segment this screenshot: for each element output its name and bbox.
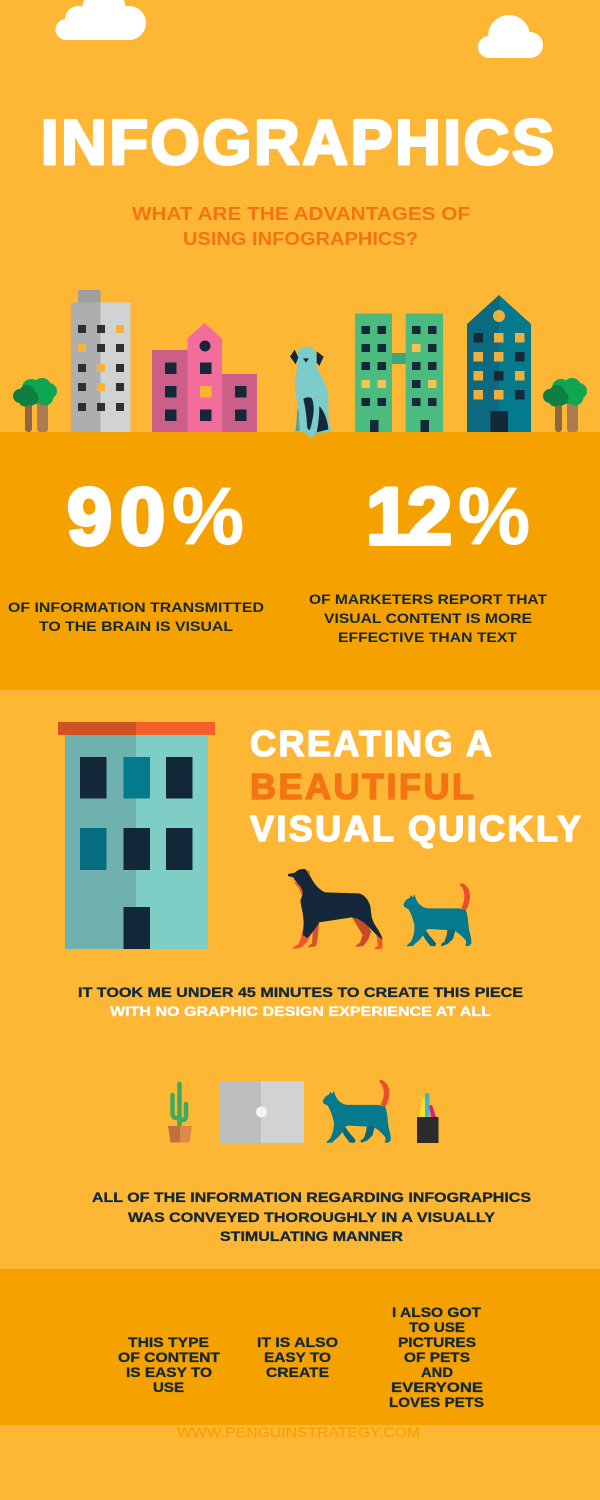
text: 90 percent caption: TO THE BRAIN IS VISUAL [39,618,233,634]
heading: creating a beautiful visual quickly: CREATING A [250,723,492,764]
text: information summary: ALL OF THE INFORMATION REGARDING INFOGRAPHICS [92,1190,531,1205]
icon: green twin tower [355,314,443,432]
icon: pencil cup [417,1093,438,1143]
text: easy to create [257,1335,338,1380]
text: pictures of pets: I ALSO GOT [392,1305,482,1320]
icon: pink building [152,323,257,432]
text: creation time note [78,985,523,1019]
icon: cat [403,883,471,946]
text: pictures of pets: EVERYONE [391,1380,483,1395]
icon: left cloud [56,0,146,40]
text: easy to create: EASY TO [264,1350,331,1365]
text: pictures of pets: TO USE [409,1320,465,1335]
subtitle: WHAT ARE THE ADVANTAGES OF [132,203,470,224]
text: pictures of pets: OF PETS [404,1350,470,1365]
icon: right cloud [478,15,543,58]
text: 90 percent caption: OF INFORMATION TRANSMITTED [8,599,264,615]
text: 12 percent caption: OF MARKETERS REPORT THAT [309,591,547,607]
footer: website: WWW.PENGUINSTRATEGY.COM [177,1425,420,1440]
title: INFOGRAPHICS [41,108,554,178]
text: pictures of pets: LOVES PETS [389,1395,484,1410]
band: statistics background [0,432,600,690]
text: easy to use: USE [153,1380,184,1395]
subtitle: USING INFOGRAPHICS? [183,228,418,249]
icon: large teal building [58,722,215,949]
heading: creating a beautiful visual quickly: VISUAL QUICKLY [250,808,581,849]
text: pictures of pets: AND [421,1365,453,1380]
icon: rottweiler dog [288,869,382,949]
text: creation time note: WITH NO GRAPHIC DESIGN EXPERIENCE AT ALL [110,1004,491,1019]
icon: cactus [168,1084,192,1142]
text: pictures of pets: PICTURES [398,1335,476,1350]
icon: left trees [13,378,57,432]
icon: cat second [323,1080,391,1143]
heading: creating a beautiful visual quickly: BEAUTIFUL [250,766,474,807]
text: easy to use [118,1335,221,1395]
text: 12 percent caption [309,591,547,645]
text: 12 percent caption: VISUAL CONTENT IS MORE [324,610,532,626]
icon: right trees [543,378,587,432]
text: easy to create: CREATE [266,1365,329,1380]
heading: creating a beautiful visual quickly [250,723,581,849]
text: information summary [92,1190,531,1244]
icon: sitting dog [290,347,332,439]
icon: tablet [219,1081,304,1143]
band: bottom three points background [0,1269,600,1425]
text: easy to use: THIS TYPE [128,1335,209,1350]
text: 12 percent caption: EFFECTIVE THAN TEXT [338,629,517,645]
text: easy to use: IS EASY TO [126,1365,212,1380]
text: information summary: STIMULATING MANNER [220,1229,403,1244]
text: information summary: WAS CONVEYED THOROUGHLY IN A VISUALLY [128,1210,495,1225]
subtitle [132,203,470,249]
icon: grey tower [71,290,130,432]
text: easy to use: OF CONTENT [118,1350,221,1365]
text: 90 percent caption [8,599,264,634]
stat: 90 percent: 90% [67,472,244,562]
icon: blue townhouse [467,295,531,432]
text: easy to create: IT IS ALSO [257,1335,338,1350]
text: creation time note: IT TOOK ME UNDER 45 MINUTES TO CREATE THIS PIECE [78,985,523,1000]
text: pictures of pets [389,1305,484,1410]
stat: 12 percent: 12% [366,472,530,562]
